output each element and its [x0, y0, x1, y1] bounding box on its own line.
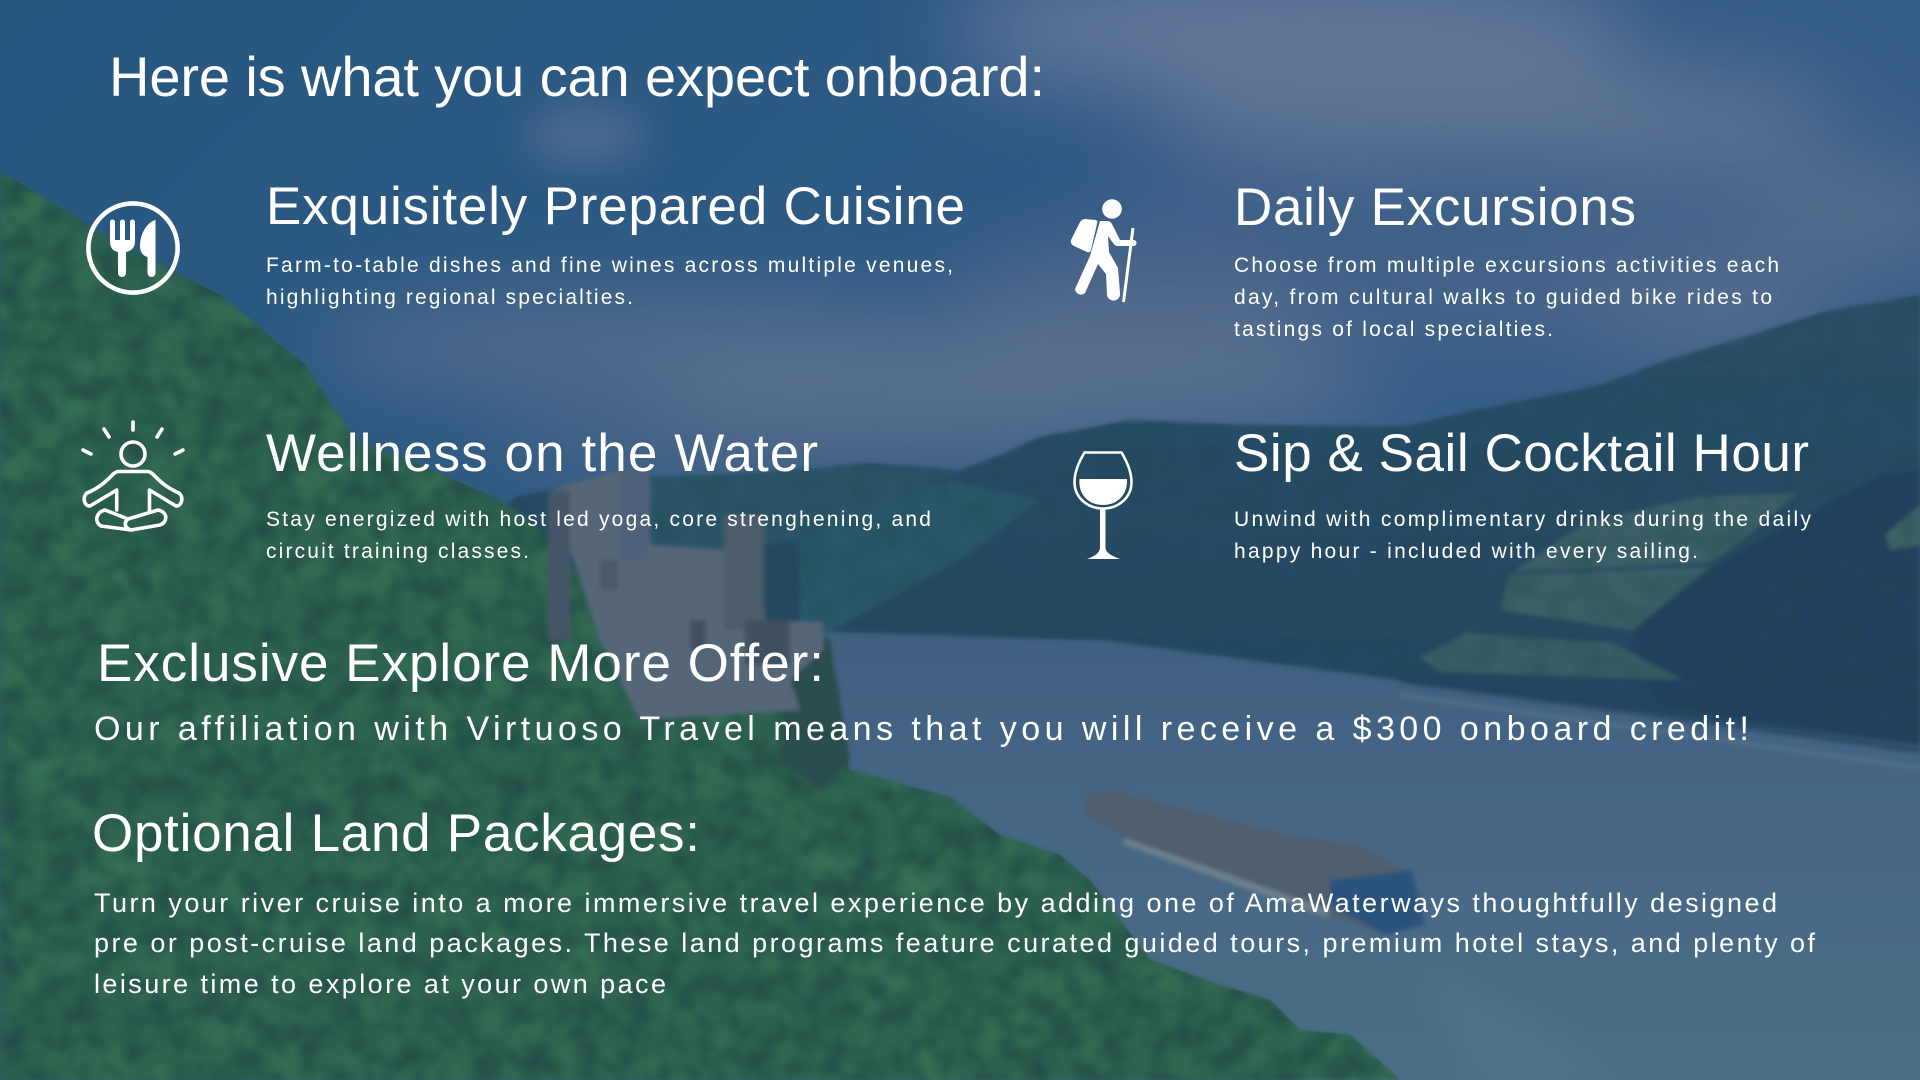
river — [600, 620, 1920, 1080]
text: excursions description — [1234, 254, 1779, 341]
panel: cuisine — [88, 177, 965, 309]
heading: cocktail hour: Sip & Sail Cocktail Hour — [1234, 424, 1809, 483]
text: cocktail description: happy hour - included with every sailing. — [1234, 540, 1698, 563]
icon: meditating figure — [83, 422, 183, 530]
text: cocktail description: Unwind with complimentary drinks during the daily — [1234, 508, 1812, 531]
heading: cuisine: Exquisitely Prepared Cuisine — [266, 177, 965, 236]
text: land packages description: pre or post-cruise land packages. These land programs feature curated guided tours, premium hotel stays, and plenty of — [94, 928, 1815, 958]
text: land packages description: leisure time to explore at your own pace — [94, 969, 666, 999]
text: cocktail description — [1234, 508, 1812, 563]
heading: wellness: Wellness on the Water — [266, 424, 818, 483]
text: offer description: Our affiliation with Virtuoso Travel means that you will receive a $300 onboard credit! — [94, 710, 1749, 748]
heading: excursions: Daily Excursions — [1234, 178, 1636, 237]
text: land packages description — [94, 888, 1815, 999]
text: cuisine description: Farm-to-table dishes and fine wines across multiple venues, — [266, 254, 953, 277]
panel: explore more offer — [94, 634, 1749, 748]
panel: excursions — [1071, 178, 1779, 341]
text: excursions description: Choose from multiple excursions activities each — [1234, 254, 1779, 277]
text: wellness description: circuit training classes. — [266, 540, 529, 563]
panel: cocktail hour — [1074, 424, 1812, 563]
icon: fork and knife in circle — [88, 203, 178, 293]
distant hills — [480, 295, 1920, 768]
heading: land packages: Optional Land Packages: — [92, 804, 700, 863]
left hillside — [0, 172, 1398, 1080]
title: Here is what you can expect onboard: — [109, 45, 1045, 108]
text: cuisine description: highlighting regional specialties. — [266, 286, 633, 309]
text: wellness description: Stay energized with host led yoga, core strenghening, and — [266, 508, 931, 531]
cruise ship — [1083, 790, 1425, 935]
text: excursions description: day, from cultural walks to guided bike rides to — [1234, 286, 1772, 309]
castle — [548, 470, 850, 790]
text: cuisine description — [266, 254, 953, 309]
icon: hiker — [1071, 199, 1137, 302]
clouds — [310, 0, 1920, 475]
heading: offer: Exclusive Explore More Offer: — [97, 634, 824, 693]
panel: land packages — [92, 804, 1815, 999]
text: excursions description: tastings of local specialties. — [1234, 318, 1553, 341]
panel: wellness — [83, 422, 931, 563]
wake on river — [1410, 950, 1620, 1080]
icon: wine glass — [1074, 452, 1132, 559]
text: wellness description — [266, 508, 931, 563]
text: land packages description: Turn your river cruise into a more immersive travel experience by adding one of AmaWaterways thoughtfully designed — [94, 888, 1777, 918]
